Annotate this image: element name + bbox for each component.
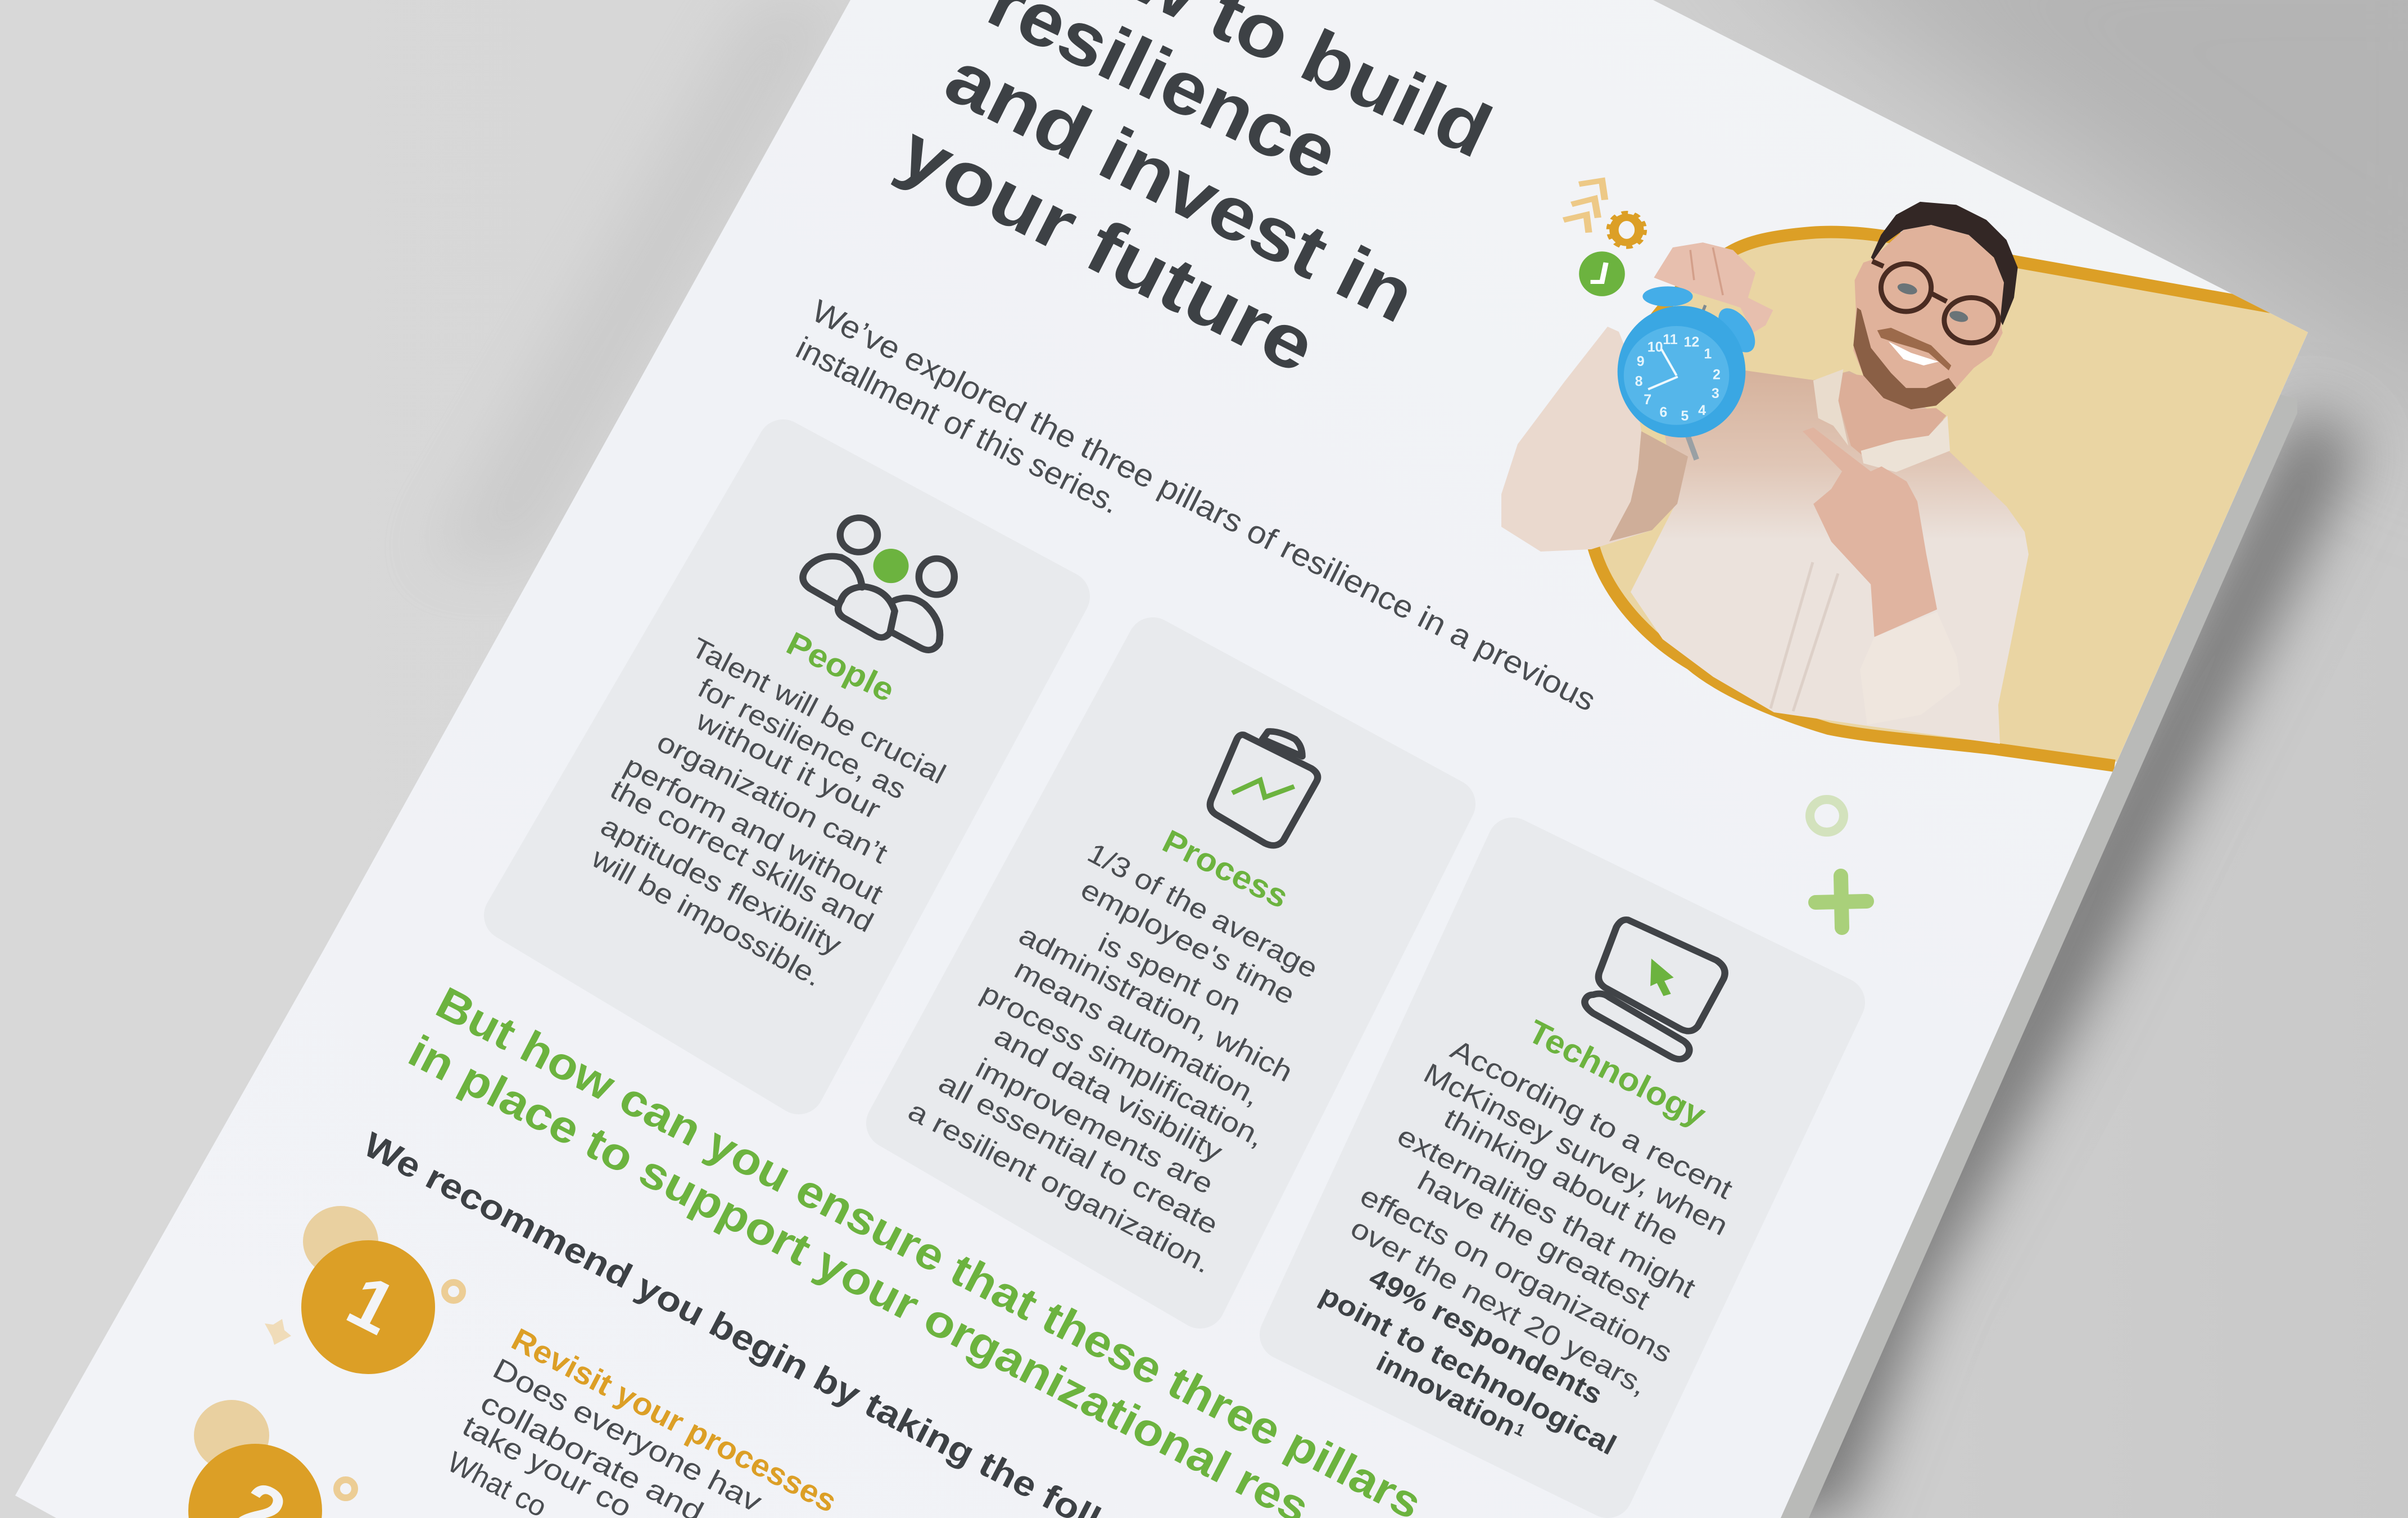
technology text: externalities that might (1392, 1119, 1701, 1304)
technology text: Technology (1522, 1013, 1712, 1133)
step 1 badge (265, 1206, 463, 1374)
step 1 text: Does everyone hav (487, 1352, 767, 1518)
photo: man holding alarm clock (1501, 202, 2029, 744)
fist and alarm clock: 2 (1713, 367, 1721, 383)
neck, collar and head, drawn at reference zoom scale (1813, 202, 2018, 472)
people text: aptitudes flexibility (596, 810, 847, 961)
process text: improvements are (971, 1052, 1219, 1200)
title (886, 0, 1504, 389)
green question heading: in place to support your organizational res (401, 1025, 1317, 1518)
people text: perform and without (619, 749, 888, 910)
icon: plus (1816, 876, 1867, 928)
process text: employee's time (1076, 873, 1300, 1011)
fist and alarm clock: 5 (1681, 408, 1689, 424)
panel: technology card (1285, 843, 1840, 1493)
process text: Process (1157, 823, 1294, 915)
people text: without it your (691, 704, 886, 825)
intro text: installment of this series. (791, 329, 1125, 521)
fist and alarm clock: 6 (1659, 404, 1667, 420)
fist and alarm clock: 3 (1712, 386, 1719, 401)
fist and alarm clock: 9 (1637, 354, 1645, 369)
technology text (1315, 1013, 1737, 1461)
technology text: innovation (1372, 1345, 1521, 1442)
process text: means automation, (1010, 953, 1265, 1112)
fist and alarm clock: 4 (1698, 403, 1706, 418)
fist and alarm clock: 10 (1647, 339, 1663, 355)
icon: clipboard chart (1210, 731, 1318, 846)
people text: Talent will be crucial (686, 631, 951, 790)
pointing hand and cuff (1803, 427, 1961, 725)
people text (586, 625, 951, 992)
process text: 1/3 of the average (1083, 837, 1323, 984)
hero blob (1587, 232, 2308, 766)
people text: People (781, 625, 900, 709)
icon: people (803, 518, 954, 650)
process text: a resilient organization. (903, 1095, 1216, 1280)
booklet page stack edge (1765, 394, 2297, 1518)
fist and alarm clock (1618, 242, 1773, 459)
intro text: We’ve explored the three pillars of resilience in a previous (807, 292, 1601, 718)
green question heading: But how can you ensure that these three pillars (428, 977, 1429, 1518)
torso (1631, 371, 2029, 744)
technology text: 1 (1511, 1420, 1528, 1440)
title: your future (886, 109, 1329, 389)
process text (903, 823, 1323, 1280)
shirt placket (1771, 562, 1838, 711)
icon: chevrons (1564, 180, 1605, 233)
technology text: According to a recent (1446, 1033, 1737, 1205)
technology text: point to technological (1315, 1278, 1622, 1461)
people text: for resilience, as (693, 672, 911, 806)
step 1 text: take your co (457, 1409, 637, 1518)
people text: the correct skills and (605, 773, 879, 938)
step 1 badge: 1 (335, 1259, 409, 1350)
recommendation line: We recommend you begin by taking the foll (357, 1125, 1107, 1518)
process text: process simplification, (976, 977, 1270, 1153)
people text: will be impossible. (586, 842, 827, 992)
panel: people card (509, 445, 1065, 1089)
panel: process card (891, 643, 1450, 1303)
fist and alarm clock: 11 (1663, 332, 1678, 347)
title: and invest in (933, 35, 1428, 338)
technology text: 49% respondents (1364, 1261, 1608, 1411)
process text: all essential to create (934, 1067, 1223, 1241)
icon: gear (1609, 213, 1645, 247)
step 1 text: Revisit your processes (506, 1321, 843, 1518)
technology text: McKinsey survey, when (1419, 1057, 1733, 1242)
fist and alarm clock: 8 (1635, 374, 1643, 390)
fist and alarm clock: 7 (1644, 392, 1651, 408)
icon: laptop cursor (1585, 920, 1725, 1059)
fist and alarm clock: 1 (1704, 346, 1712, 362)
arm fold shadow (1609, 431, 1688, 541)
icon: ring (1810, 799, 1844, 832)
technology text: over the next 20 years, (1346, 1212, 1653, 1402)
process text: administration, which (1014, 919, 1298, 1088)
sleeve (1501, 327, 1664, 552)
technology text: have the greatest (1413, 1164, 1655, 1316)
people text: organization can’t (652, 726, 893, 870)
fist and alarm clock: 12 (1683, 335, 1699, 350)
icon: green check clock (1579, 251, 1625, 296)
step 1 text: collaborate and (475, 1386, 709, 1518)
process text: and data visibility (989, 1019, 1228, 1168)
step 2 badge (188, 1400, 355, 1518)
technology text: effects on organizations (1355, 1180, 1677, 1369)
technology text: thinking about the (1439, 1102, 1684, 1253)
process text: is spent on (1093, 927, 1246, 1022)
